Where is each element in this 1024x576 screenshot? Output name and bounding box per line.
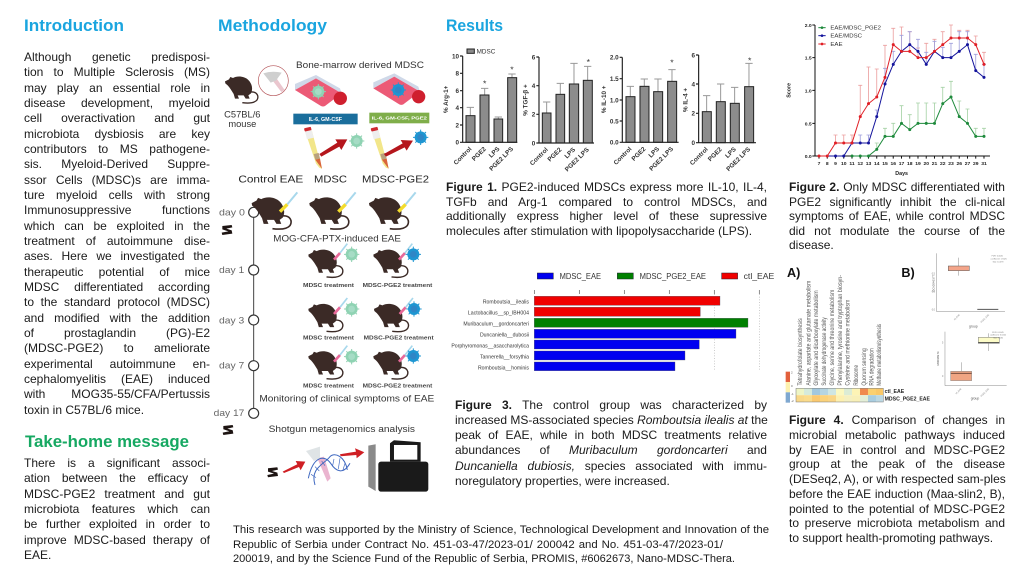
heatmap pathway labels: Phenylalanine, tyrosine and tryptophan biosyn- [838,275,844,386]
text block: introduction: cell overactivation and gut [24,111,210,125]
treatment row: day 3: MDSC-PGE2 treatment [364,336,434,342]
label: group names: MDSC-PGE2 [362,175,429,186]
heatmap pathway labels: Glyoxylate and dicarboxylate metabolism [814,290,820,386]
icon: flask with MDSC-PGE2 [373,73,425,105]
caption: figure 1: additionally express higher level of these supressive [446,209,767,223]
text block: take-home message: EAE. [24,548,51,562]
bar chart: IL-4: 6 [691,52,695,59]
heatmap pathway labels: Methane metabolism/synthesis [877,324,883,386]
text block: introduction: Although genetic predisposi- [24,50,210,64]
axes: 27 [965,161,970,167]
axes: 31 [981,161,987,167]
icon: MDSC cell [349,133,364,149]
bar chart: IL-4: * [748,55,752,65]
label: C57BL/6 mouse: C57BL/6 [224,110,260,120]
bar chart: IL-10: 0.0 [610,140,619,147]
axes: 8 [826,161,829,167]
caption: figure 3: Duncaniella dubiosis, species associated with immu- [455,459,767,473]
bar chart: Arg-1: 6 [455,88,459,95]
heatmap pathway labels: Succinate dehydrogenase activity [822,317,828,386]
arrow: stool to DNA [283,461,305,473]
legend: EAE/MDSC [830,34,862,40]
bar chart: IL-10: LPS [647,146,661,159]
caption: figure 4: pointed to the potential of MDSC-PGE2 [789,502,1005,516]
box plot: top: 0.0 [932,310,936,312]
bar chart: Arg-1: Control [453,146,474,167]
bar chart: Arg-1: PGE2 LPS [488,146,515,173]
EAE induction mice [252,192,416,229]
icon: stool sample day 17 [223,425,233,435]
box plot: bottom [936,332,1007,400]
text block: introduction: toxin in C57BL/6 mice. [24,403,144,417]
label: group names: MDSC [314,175,348,186]
legend: MDSC_EAE [560,272,601,281]
label: group names: Control EAE [238,175,303,186]
axes: 11 [849,161,855,167]
bar chart: IL-10: 2.0 [610,55,619,62]
arrow: DNA to sequencer [340,448,364,458]
arrow: PGE2 culture to cell [384,140,413,157]
bar chart: IL-10: PGE2 LPS [648,146,675,173]
bars [534,296,748,371]
caption: figure 2: symptoms of EAE, while control MDSC [789,209,1005,223]
treatment row: day 7: MDSC treatment [303,384,354,390]
label box: IL-6, GM-CSF: IL-6, GM-CSF [309,117,343,123]
bar chart: Arg-1: 2 [455,122,459,129]
text block: take-home message: microbiota features which can [24,502,210,516]
axes: 12 [857,161,863,167]
heading: Take-home message: Take-home message [25,433,189,451]
bar chart: Arg-1: * [510,64,514,74]
text block: introduction: microbiota dysbiosis are key [24,127,210,141]
heatmap pathway labels: Quorum sensing [862,348,868,386]
heatmap colour scale [786,371,794,403]
bar chart: Arg-1: * [483,79,487,89]
bar chart: Arg-1: 8 [455,71,459,78]
axes: 21 [932,161,937,167]
bar chart: TGF-beta: 6 [532,54,536,61]
text block: take-home message [24,456,210,562]
label box: IL-6, GM-CSF, PGE2 [369,113,429,123]
box plot: bottom: PGE2_EAE [980,387,990,398]
caption: figure 2: did not modulate the course of the [789,224,1005,238]
heatmap pathway labels [798,275,883,386]
bar chart: Arg-1: % Arg-1+ [443,85,450,113]
axes: 2.0 [805,23,812,29]
text block: introduction: to the standard protocol (MDSC) [24,295,210,309]
box plot: bottom: 0 [942,376,944,378]
label: group names [238,175,429,186]
axes [787,23,990,177]
bar chart: IL-10 [601,55,679,173]
bar chart: TGF-beta: 0 [532,140,536,147]
heatmap pathway labels: Alanine, aspartate and glutamate metabolism [806,281,812,386]
treatment row: day 7 [303,346,432,390]
caption: figure 4: group at the peak of the disease [789,457,1005,471]
icon: MDSC-PGE2 cell [413,130,428,145]
caption: figure 4: to support health-promoting pathways. [789,531,993,545]
heatmap row labels: MDSC_PGE2_EAE [885,396,930,402]
bar chart: IL-10: 1.5 [610,76,619,83]
text block: introduction: cephalomyelitis (EAE) induced [24,372,210,386]
axes: 1.0 [805,88,812,94]
legend: ctl_EAE [744,272,774,281]
timeline [214,207,259,418]
caption: figure 4: to preserve microbiota metabolism and [789,516,1005,530]
box plot: bottom: Stat: 9.636 [993,336,1004,339]
text block: introduction: which can be exploited in the [24,219,210,233]
axes: Days [895,171,908,177]
bar chart: TGF-beta: PGE2 LPS [564,146,591,173]
axes: 7 [818,161,821,167]
text block: take-home message: There is a significant associ- [24,456,210,470]
heatmap colour scale: -2 [791,399,794,403]
species labels: Muribaculum__gordoncarteri [463,322,529,328]
bar chart: Arg-1: 4 [455,105,459,112]
caption: figure 3: Figure 3. The control group was characterized by [455,398,767,412]
heatmap pathway labels: RNA degradation [870,348,876,386]
caption: figure 4: before the EAE induction (Maa-slin2, B), [789,487,1005,501]
caption: figure 3: noregulatory properties, were increased. [455,474,670,488]
box plot: top: GO:0046377 [932,274,936,292]
arrow: MDSC culture to cell [319,139,347,157]
box plot: bottom: ctl_EAE [955,387,963,395]
axes: 20 [923,161,929,167]
caption: figure 4: by EAE in control and MDSC-PGE2 [789,442,1005,456]
box plot: top: 0.5 [932,273,936,275]
bar chart: TGF-beta: Control [529,146,550,167]
box plot: top: ctl_EAE [953,313,961,321]
box plot: bottom: 5 [942,342,944,344]
box plot: top: Stat: 10.078 [993,260,1004,263]
axes: 17 [899,161,904,167]
funding acknowledgement: This research was supported by the Ministry of Science, Technological Development and Innovation of the [233,524,769,536]
axes: 23 [948,161,954,167]
legend: EAE [830,42,843,48]
treatment row: day 3: MDSC treatment [303,336,354,342]
axes: Score [787,83,793,98]
line: EAE/MDSC [819,45,984,156]
box plot: bottom: group [971,396,979,400]
species labels: Romboutsia__ilealis [483,300,529,306]
bar chart: Arg-1 [443,53,517,173]
text block: introduction: (MDSC-PGE2) to ameliorate [24,341,210,355]
caption: figure 1: TGFb and Arg-1 compared to control MDSCs, and [446,195,767,209]
bar chart: Arg-1: LPS [488,146,501,159]
funding acknowledgement: 200019, and by the Science Fund of the Republic of Serbia, PROMIS, #6062673, Nano-MDSC-Thera. [233,553,735,565]
legend [818,26,881,48]
text block: introduction: with MOG35-55/CFA/Pertussis [24,387,210,401]
text block: introduction: Immunosuppressive functions [24,203,210,217]
bar chart: TGF-beta [522,54,594,173]
box plot: top: 0.3 [932,291,936,293]
bar chart: IL-4: Control [689,146,710,167]
caption: figure 4: microbial metabolic pathways induced [789,428,1005,442]
bar chart: Arg-1: 0 [455,140,459,147]
heading: Results: Results [446,17,503,35]
bar chart: IL-4: PGE2 LPS [725,146,752,173]
species labels: Porphyromonas__asaccharolytica [451,344,529,350]
text block: introduction: experimental autoimmune en- [24,357,210,371]
caption: figure 2: Figure 2. Only MDSC differentiated with [789,180,1005,194]
label: A: A) [787,266,800,280]
timeline: day 3 [219,315,244,325]
text block: take-home message: improve MDSC-based therapy of [24,533,210,547]
species labels: Duncaniella__dubosii [480,333,529,339]
funding acknowledgement [233,524,769,565]
bar chart: IL-4: PGE2 [707,146,724,163]
label: monitoring of clinical symptoms: Monitoring of clinical symptoms of EAE [259,393,434,403]
text block: introduction: disease development, myeloid [24,96,210,110]
text block: introduction: ture myeloid cells with strong [24,188,210,202]
error bars: EAE [833,25,986,143]
error bars: EAE/MDSC_PGE2 [875,81,986,149]
bar chart: TGF-beta: 2 [532,112,536,119]
box plot: top: group [969,325,978,329]
bar chart: IL-4: 0 [691,140,695,147]
figure 4: heatmap and box plots [786,253,1008,403]
heatmap pathway labels: Cysteine and methionine metabolism [846,300,852,386]
text block: introduction: ases. Here we investigated the [24,249,210,263]
line: EAE [819,38,984,156]
legend [537,272,774,281]
icon: stool sample for sequencing [267,467,278,477]
bar chart: IL-4: % IL-4 + [682,88,689,112]
bar chart: IL-10: Control [613,146,634,167]
axes: 29 [973,161,979,167]
bar chart: TGF-beta: LPS [563,146,577,160]
treatment row: day 1: MDSC-PGE2 treatment [363,283,432,289]
text block: introduction: of prostaglandin (PG)-E2 [24,326,210,340]
bar chart: IL-10: 0.5 [610,118,619,125]
caption: figure 1 [446,180,767,238]
caption: figure 3: abundances of Muribaculum gordoncarteri and [455,443,767,457]
bar chart: IL-10: PGE2 [631,145,648,163]
bar chart: Arg-1: 10 [452,53,459,60]
bar chart: IL-10: % IL-10 + [601,85,608,113]
heatmap pathway labels: Glycine, serine and threonine metabolism [830,290,836,386]
timeline: day 7 [219,361,244,371]
label: bone-marrow derived MDSC: Bone-marrow derived MDSC [296,60,425,70]
heatmap cells [796,388,883,402]
label box: IL-6, GM-CSF, PGE2: IL-6, GM-CSF, PGE2 [372,116,427,122]
label: shotgun metagenomics analysis: Shotgun metagenomics analysis [269,424,416,434]
axes: 13 [866,161,871,167]
text block: introduction: contributors to MS pathogene- [24,142,210,156]
text block: introduction [24,50,210,417]
error bars: EAE/MDSC [858,32,986,143]
icon: sequencer [368,440,428,492]
species labels: Tannerella__forsythia [480,354,529,360]
box plot: top [932,253,1008,329]
bar chart: TGF-beta: 4 [532,83,536,90]
text block: take-home message: ation between the efficacy of [24,471,210,485]
caption: figure 2 [789,180,1005,252]
text block: introduction: MDSC differentiated according [24,280,210,294]
icon: bone marrow femur [258,66,288,96]
heading: Methodology: Methodology [218,17,328,35]
heatmap row labels: ctl_EAE [885,389,905,395]
caption: figure 4: (DESeq2, A), or with respected sam-ples [789,472,1006,486]
species labels: Romboutsia__hominis [478,365,529,371]
caption: figure 3: increased MS-associated species Romboutsia ilealis at the [455,413,768,427]
axes: 1.5 [805,56,812,62]
legend: EAE/MDSC_PGE2 [830,26,881,32]
treatment row: day 7: MDSC-PGE2 treatment [363,384,432,390]
caption: figure 2: PGE2 significantly inhibit the cli-nical [789,195,1005,209]
timeline: day 1 [219,265,244,275]
icon: MDSC-PGE2 tube [371,127,389,169]
legend: MDSC: MDSC [477,49,496,56]
text block: take-home message: be further exploited in order to [24,517,210,531]
legend: MDSC [467,49,496,56]
box plot: top: PGE2_EAE [980,313,990,324]
panel: methodology timeline and treatment [214,192,434,492]
heading: Introduction: Introduction [24,17,124,35]
caption: figure 1: Figure 1. PGE2-induced MDSCs express more IL-10, IL-4, [446,180,767,194]
axes: 26 [956,161,962,167]
box plot: bottom: FDR: 0.0045 [992,332,1004,334]
axes: 15 [882,161,888,167]
text block: introduction: therapeutic potential of mice [24,265,210,279]
line: EAE/MDSC_PGE2 [852,97,984,156]
panel: methodology top, cell preparation [224,60,429,186]
axes: 14 [874,161,880,167]
box plot: bottom: M00989 % [936,351,940,365]
caption: figure 4: Figure 4. Comparison of changes in [789,413,1005,427]
label: MOG-CFA-PTX-induced EAE: MOG-CFA-PTX-induced EAE [273,233,401,243]
bar chart: IL-10: * [670,58,674,68]
text block: introduction: may play an essential role in [24,81,210,95]
box plot: top: FDR: 0.0045 [992,256,1004,258]
heatmap colour scale: 0 [791,384,793,388]
axes: 0.5 [805,121,812,127]
text block: introduction: and modified with the addition [24,311,210,325]
caption: figure 3: peak of EAE, while in both MDSC treatments relative [455,428,767,442]
text block: take-home message: MDSC-PGE2 treatment and gut [24,487,210,501]
caption: figure 3 [455,398,768,488]
icon: C57BL/6 mouse [225,77,258,103]
box plot: top: coefficient: 1.9425 [991,258,1008,261]
axes: 9 [834,161,837,167]
heatmap pathway labels: Tetrahydrofolate biosynthesis [798,318,804,386]
text block: introduction: sis. Myeloid-Derived Suppre- [24,157,210,171]
figure 2: clinical score line chart [787,23,990,177]
caption: figure 2: disease. [789,238,834,252]
caption: figure 1: molecules after stimulation with lipopolysaccharide (LPS). [446,224,752,238]
text block: introduction: tion to Multiple Sclerosis (MS) [24,65,210,79]
heatmap row labels [885,389,930,402]
axes: 0.0 [805,154,812,160]
axes: 19 [915,161,921,167]
figure 3: LEfSe species bar chart [451,272,774,371]
heatmap colour scale: 2 [791,371,793,375]
treatment row: day 1 [303,244,432,289]
label box: IL-6, GM-CSF [293,114,358,124]
axes: 22 [940,161,946,167]
bar chart: IL-4: LPS [724,146,738,160]
legend: MDSC_PGE2_EAE [640,272,706,281]
axis ticks and grid [534,290,759,294]
heatmap pathway labels: Ribosome [854,364,860,386]
bar chart: TGF-beta: PGE2 [547,146,564,163]
species labels [451,300,529,371]
timeline: day 17 [214,408,244,418]
bar chart: IL-4: 2 [691,111,695,118]
text block: introduction: ssor Cells (MDSC)s are imma- [24,173,210,187]
treatment row: day 3 [303,298,434,342]
text block: introduction: treatment of autoimmune dise- [24,234,210,248]
timeline: day 0 [219,208,245,218]
bar chart: TGF-beta: % TGF-β + [522,84,529,116]
icon: flask with MDSC [295,75,347,106]
figure 1: bar charts of MDSC markers [443,49,756,173]
axes: 18 [907,161,913,167]
bar chart: IL-10: 1.0 [610,97,619,104]
bar chart: IL-4: 4 [691,81,695,88]
label: B: B) [901,266,915,280]
axes: 16 [890,161,896,167]
icon: DNA helix and tube [306,447,350,485]
bar chart: IL-4 [682,52,756,173]
caption: figure 4 [789,413,1006,545]
treatment row: day 1: MDSC treatment [303,283,354,289]
icon: stool sample day 0 [222,225,232,235]
bar chart: Arg-1: PGE2 [471,145,488,163]
species labels: Lactobacillus__sp_IBH004 [468,311,529,317]
box plot: bottom: coefficient: 3.6242 [990,334,1006,337]
heatmap colour scale: -1 [791,392,794,396]
label: C57BL/6 mouse: mouse [228,119,256,129]
funding acknowledgement: Republic of Serbia under Contract No. 451-03-47/2023-01/ 200042 and No. 451-03-47/2023-01/ [233,539,723,551]
icon: MDSC tube [304,127,322,169]
axes: 10 [841,161,847,167]
bar chart: TGF-beta: * [587,57,591,67]
